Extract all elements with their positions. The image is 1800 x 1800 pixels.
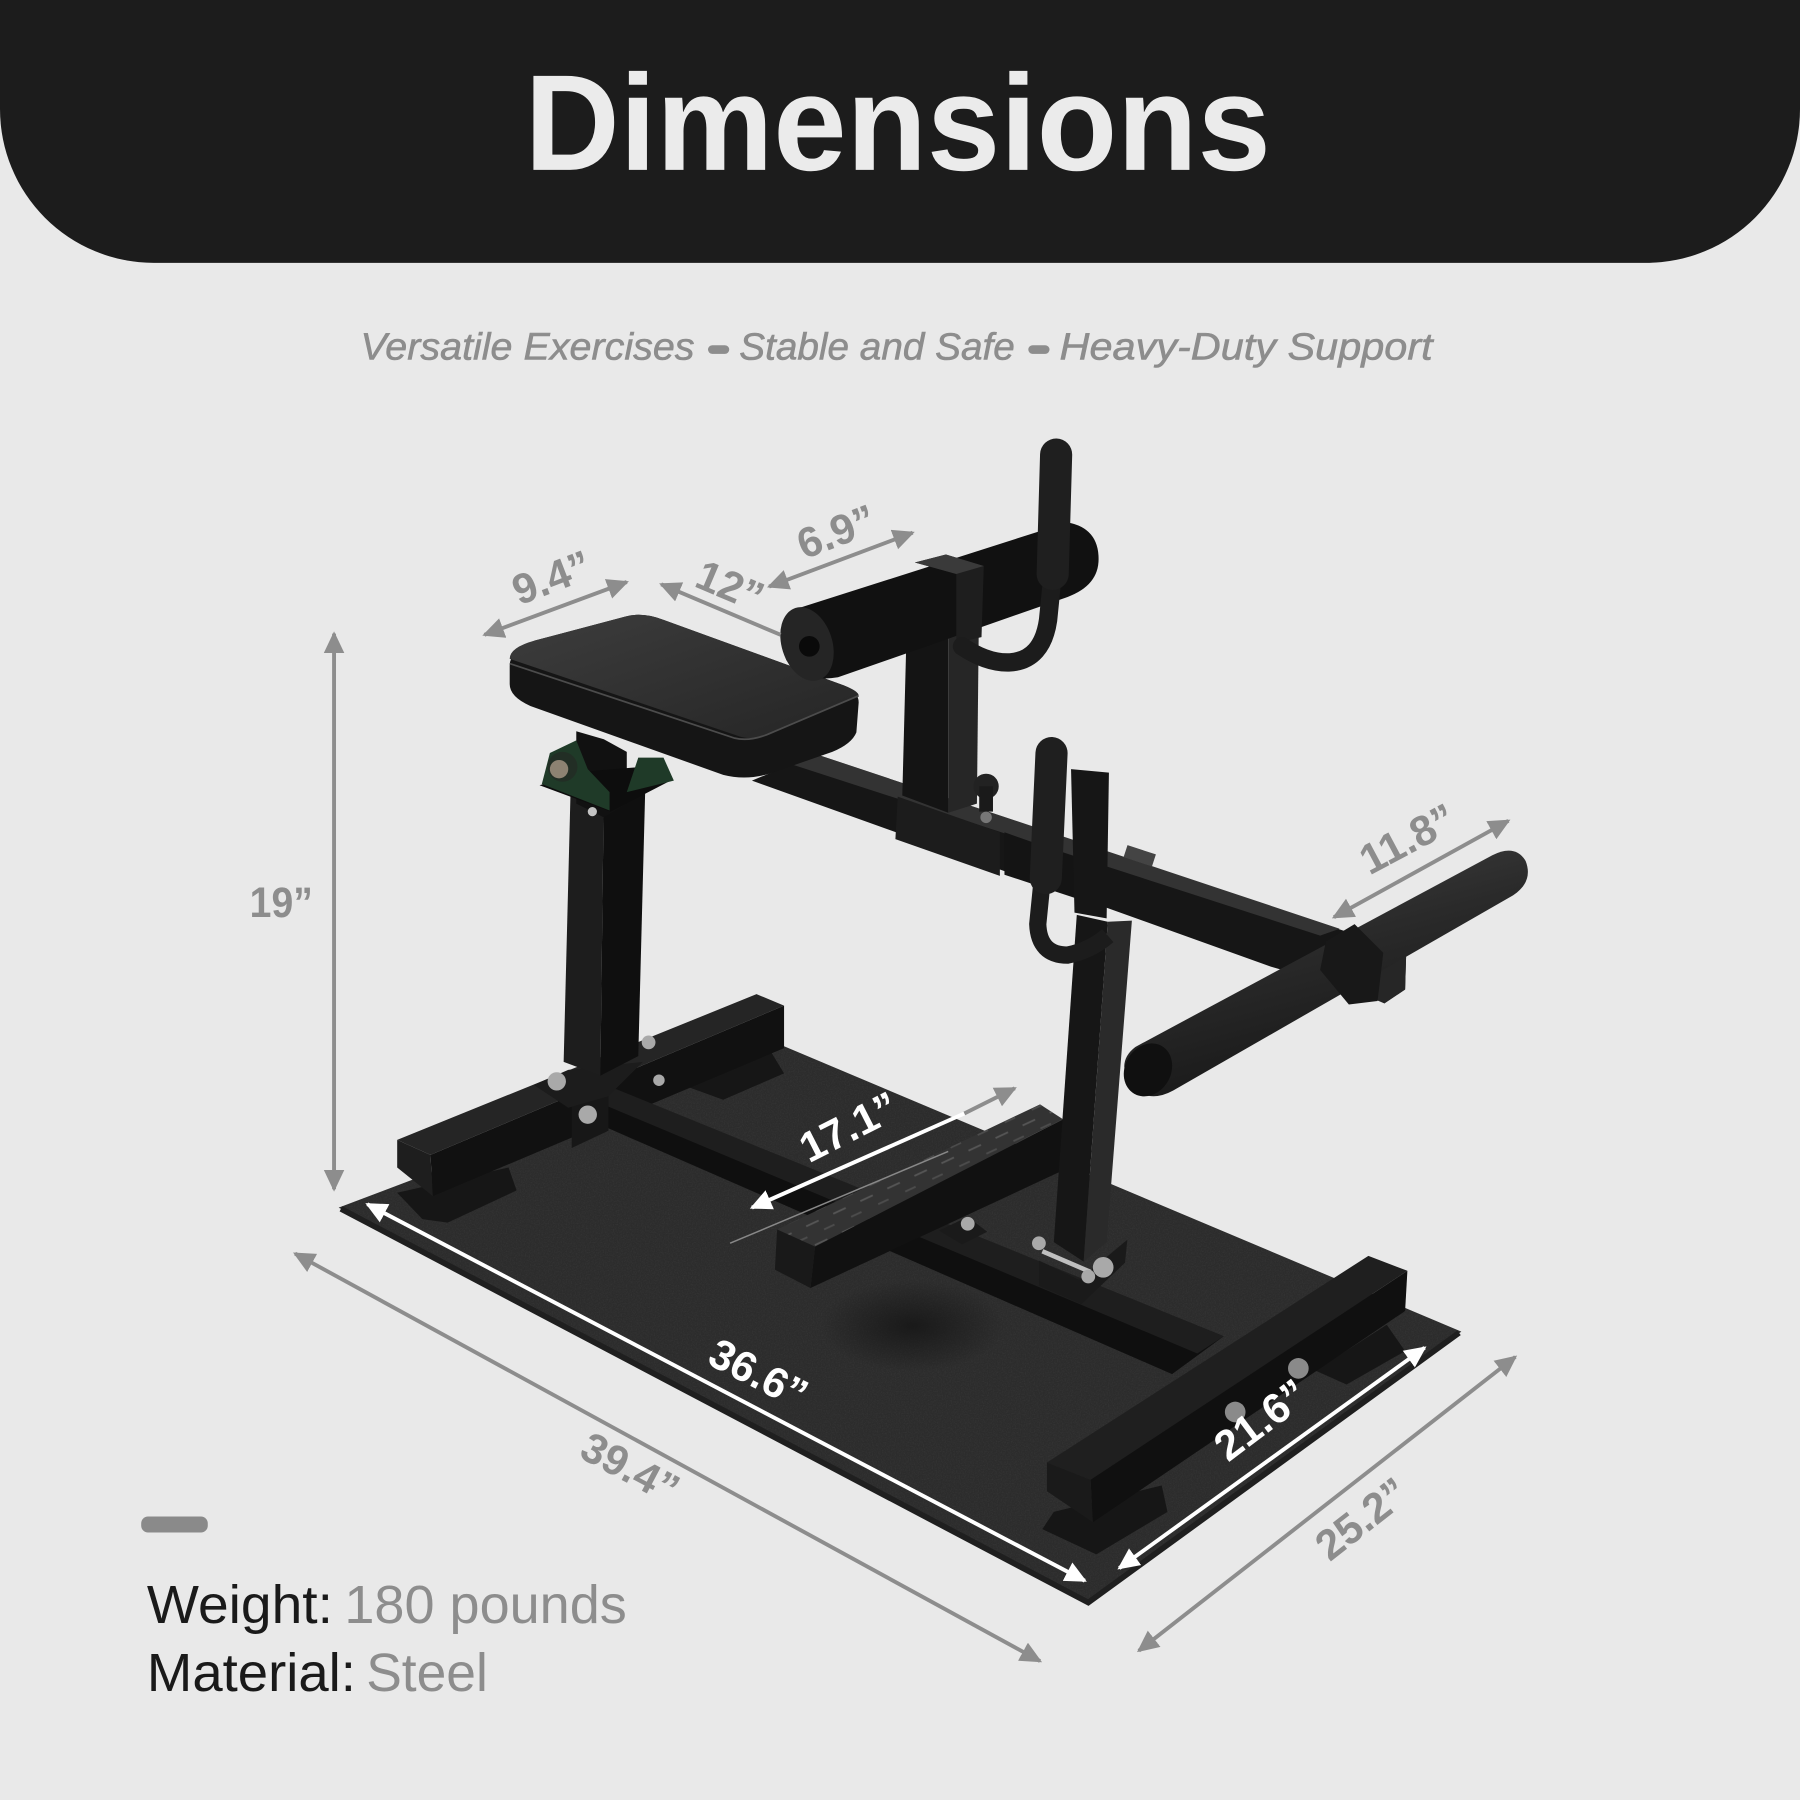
- foot pedal plate: [730, 1104, 1063, 1288]
- front base crossbar with rubber feet: [1042, 1256, 1407, 1554]
- arrow: mat length 39.4 in: [295, 1254, 1040, 1661]
- upper handle grip: [1053, 455, 1056, 574]
- label: 21.6 in: 21.6”: [1205, 1370, 1317, 1470]
- rear base crossbar with rubber feet: [397, 994, 784, 1223]
- arrow: seat to pad 12 in: [661, 551, 781, 635]
- arrow: mat width 25.2 in: [1139, 1357, 1515, 1651]
- seat support post: [540, 731, 673, 1076]
- specs block: Material:: [147, 1643, 356, 1703]
- upper roller pad: [771, 522, 1099, 688]
- sissy squat machine: [397, 455, 1528, 1554]
- arrow: pad length 6.9 in: [769, 495, 913, 587]
- label: 11.8 in: 11.8”: [1352, 794, 1463, 884]
- base bolts: [548, 1035, 987, 1244]
- rear upright column: [902, 585, 999, 823]
- arrow: frame width 21.6 in: [1119, 1348, 1425, 1568]
- label: 6.9 in: 6.9”: [790, 495, 882, 568]
- label: 36.6 in: 36.6”: [702, 1329, 815, 1418]
- subtitle feature line: Heavy-Duty Support: [1060, 326, 1434, 368]
- arrow: pedal width 17.1 in: [752, 1082, 1015, 1208]
- long base rail: [534, 1062, 1224, 1374]
- label: 9.4 in: 9.4”: [506, 541, 597, 614]
- header banner: [0, 0, 1800, 263]
- label: 17.1 in: 17.1”: [792, 1082, 906, 1172]
- label: 19 in: 19”: [250, 879, 313, 926]
- accent pill: [141, 1516, 208, 1533]
- foot roller bar: [1114, 851, 1528, 1105]
- label: 25.2 in: 25.2”: [1306, 1468, 1417, 1569]
- specs block: Steel: [366, 1643, 488, 1703]
- label: 12 in: 12”: [689, 551, 771, 621]
- arrow: seat width 9.4 in: [484, 541, 627, 635]
- lower handle: [1038, 753, 1108, 955]
- label: 39.4 in: 39.4”: [573, 1423, 687, 1513]
- subtitle feature line: Stable and Safe: [739, 326, 1015, 368]
- seat pad: [510, 615, 859, 777]
- subtitle feature line: Versatile Exercises: [360, 326, 695, 368]
- arrow: foot roller length 11.8 in: [1334, 794, 1508, 917]
- title: Dimensions: [525, 46, 1271, 199]
- upper handle: [962, 455, 1056, 662]
- specs block: 180 pounds: [344, 1575, 627, 1635]
- arrow: frame length 36.6 in: [367, 1204, 1085, 1581]
- main beam: [752, 754, 1406, 1003]
- front upright column: [1032, 769, 1132, 1304]
- specs block: Weight:: [147, 1575, 333, 1635]
- specs block: [141, 1516, 627, 1703]
- green pillow bearing: [542, 740, 674, 816]
- subtitle feature line: [360, 326, 1434, 368]
- floor mat: [339, 1042, 1461, 1605]
